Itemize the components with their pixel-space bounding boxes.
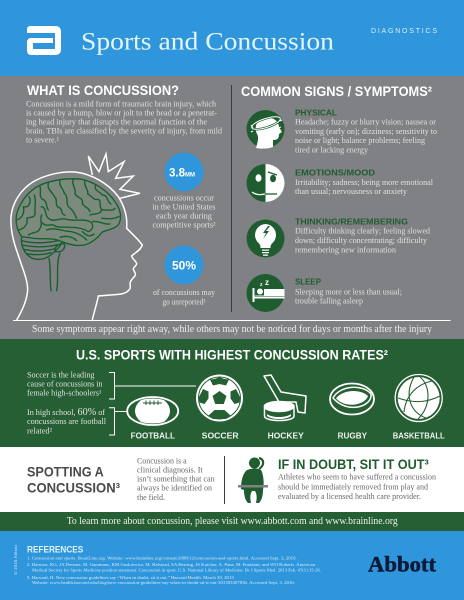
- sport labels: SOCCER: [202, 432, 239, 441]
- references list: [27, 555, 321, 586]
- text block: soccer fact: cause of concussions in: [27, 380, 102, 389]
- panel: learn more banner: To learn more about concussion, please visit www.abbott.com and www.brainline.org: [67, 516, 398, 527]
- text block: clinical diagnosis: [137, 456, 215, 502]
- references list: Medical Society for Sports Medicine position statement: Concussion in sport. U.S. National Library of Medicine. Br J Sports Med. 2013 Feb. 47(1):15-26.: [32, 568, 321, 573]
- head outline: [11, 172, 142, 320]
- text block: clinical diagnosis: Concussion is a: [137, 456, 187, 465]
- panel: learn more banner: [0, 512, 464, 531]
- text block: definition: to severe.¹: [26, 136, 60, 144]
- brain: [16, 179, 121, 291]
- stat: 50%: 50%: [172, 258, 196, 272]
- text block: definition: ing head injury that disrupts the normal function of the: [26, 118, 207, 126]
- stat: 50%: go unreported³: [162, 298, 206, 306]
- text block: clinical diagnosis: the field.: [137, 493, 165, 502]
- subheading: SLEEP: [295, 276, 321, 286]
- stat: 3.8MM: 3.8MM: [169, 168, 195, 180]
- panel: gray background: [0, 76, 464, 339]
- text block: definition: [26, 100, 222, 144]
- subheading: THINKING/REMEMBERING: [295, 216, 408, 226]
- stat: 3.8MM: in the United States: [152, 202, 216, 212]
- references heading: REFERENCES: [27, 544, 83, 554]
- icon: soccer ball: [196, 374, 243, 422]
- text block: physical: vomiting (early on); dizziness; sensitivity to: [295, 127, 437, 136]
- text block: definition: brain. TBIs are classified by the severity of injury, from mild: [26, 126, 222, 136]
- text block: physical: [295, 118, 437, 154]
- stat: 3.8MM: each year during: [156, 212, 212, 221]
- panel: header: [0, 0, 464, 76]
- text block: definition: is caused by a bump, blow or jolt to the head or a penetrat-: [26, 108, 217, 118]
- heading: if in doubt: IF IN DOUBT, SIT IT OUT³: [278, 457, 429, 472]
- text block: sleep: trouble falling asleep: [295, 296, 363, 305]
- stat: 50%: of concussions may: [153, 288, 215, 297]
- text block: soccer fact: [27, 370, 102, 398]
- text block: emotions: [295, 178, 434, 196]
- text block: removal from play: should be immediately removed from play and: [278, 482, 428, 491]
- icon: sleep: z: [265, 278, 269, 287]
- icon: physical: [246, 110, 284, 149]
- sport labels: BASKETBALL: [393, 432, 445, 441]
- text block: sleep: Sleeping more or less than usual;: [295, 287, 402, 296]
- panel: signs and symptoms: [241, 83, 437, 312]
- icon: emotions: [246, 164, 284, 202]
- text block: physical: noise or light; balance problems; feeling: [295, 136, 425, 145]
- sport labels: HOCKEY: [268, 432, 304, 441]
- subheading: EMOTIONS/MOOD: [295, 168, 375, 178]
- text block: emotions: than usual; nervousness or anxiety: [295, 187, 407, 196]
- text block: thinking: remembering new information: [295, 246, 396, 254]
- illustration: head and brain: [11, 154, 142, 320]
- icon: basketball: [395, 374, 442, 422]
- callout: symptom timing: Some symptoms appear right away, while others may not be noticed for days or months after the injury: [32, 324, 433, 335]
- references list: 1. Concussion and sports. BrainLine.org. Website: www.brainline.org/content/2008/12/concussion-and-sports.html. Accessed Sept. 3, 2016.: [27, 555, 297, 561]
- icon: sleep: [246, 274, 284, 312]
- text block: football fact: [27, 407, 107, 435]
- heading: U.S. SPORTS WITH HIGHEST CONCUSSION RATES²: [76, 347, 388, 362]
- references list: 3. Harvard, H. New concussion guidelines say “When in doubt, sit it out.” Harvard Health. March 30, 2015.: [27, 575, 235, 581]
- text block: emotions: Irritability; sadness; being more emotional: [295, 178, 434, 187]
- sport labels: FOOTBALL: [131, 432, 175, 441]
- sport labels: RUGBY: [338, 432, 368, 441]
- text block: removal from play: Athletes who seem to have suffered a concussion: [278, 472, 436, 481]
- heading: spotting a concussion: SPOTTING A: [27, 465, 104, 480]
- vertical divider: [224, 456, 225, 504]
- text block: sleep: [295, 287, 402, 305]
- icon: rugby ball: [330, 384, 374, 414]
- text block: thinking: [295, 226, 430, 254]
- text block: football fact: concussions are football: [27, 417, 107, 426]
- title: Sports and Concussion: [81, 28, 335, 56]
- text block: clinical diagnosis: always be identified on: [137, 484, 212, 493]
- text block: removal from play: [278, 472, 436, 501]
- icon: seated athlete: [238, 458, 268, 503]
- text block: football fact: In high school, 60% of: [27, 407, 105, 418]
- text block: thinking: Difficulty thinking clearly; feeling slowed: [295, 226, 430, 236]
- stat: 3.8MM: concussions occur: [154, 194, 214, 202]
- column divider: [231, 85, 232, 312]
- icon: football: [127, 397, 178, 425]
- text block: soccer fact: Soccer is the leading: [27, 370, 94, 379]
- impact burst: [88, 154, 140, 198]
- panel: what is concussion: [11, 82, 222, 320]
- bracket connectors: [109, 372, 196, 435]
- text block: removal from play: evaluated by a licensed health care provider.: [278, 492, 421, 501]
- icon: Abbott logo mark: [27, 26, 61, 55]
- Abbott wordmark: Abbott: [368, 552, 437, 577]
- division label: DIAGNOSTICS: [371, 28, 437, 35]
- stat: 50%: [153, 246, 215, 306]
- heading: spotting a concussion: [27, 465, 120, 496]
- text block: physical: Headache; fuzzy or blurry vision; nausea or: [295, 118, 436, 127]
- stat: 3.8MM: competitive sports²: [152, 221, 216, 230]
- panel: spotting and sit out: [0, 447, 464, 512]
- text block: clinical diagnosis: isn’t something that can: [137, 475, 215, 484]
- text block: definition: Concussion is a mild form of traumatic brain injury, which: [26, 100, 216, 108]
- heading: WHAT IS CONCUSSION?: [27, 82, 179, 98]
- references list: Website: www.health.harvard.edu/blog/new-concussion-guidelines-say-when-in-doubt-sit-it-out-201503307836. Accessed Sept. 3, 2016.: [32, 580, 295, 586]
- icon: sleep: z: [260, 282, 263, 288]
- text block: physical: tired or lacking energy: [295, 145, 368, 154]
- heading: spotting a concussion: CONCUSSION³: [27, 481, 120, 496]
- text block: clinical diagnosis: clinical diagnosis. It: [137, 465, 203, 474]
- panel: footer: [0, 531, 464, 600]
- icon: hockey stick and puck: [264, 375, 306, 420]
- text block: football fact: related²: [27, 426, 53, 435]
- text block: soccer fact: female high-schoolers¹: [27, 389, 102, 398]
- text block: thinking: down; difficulty concentrating; difficulty: [295, 236, 427, 245]
- stat: 3.8MM: [152, 152, 216, 230]
- copyright: © 2016 Abbott: [13, 544, 18, 575]
- references list: 2. Harmon, KG, JA Drezner, M. Gammons, KM Guskiewicz, M. Halstead, SA Herring, JS Kutcher, A. Pana, M. Putukian, and WO Roberts. American: [27, 562, 316, 568]
- icon: thinking: [246, 220, 284, 258]
- divider line: [13, 320, 450, 321]
- subheading: PHYSICAL: [295, 108, 337, 118]
- heading: COMMON SIGNS / SYMPTOMS²: [241, 83, 432, 99]
- sport labels: [131, 432, 445, 441]
- panel: sports rates: [0, 339, 464, 447]
